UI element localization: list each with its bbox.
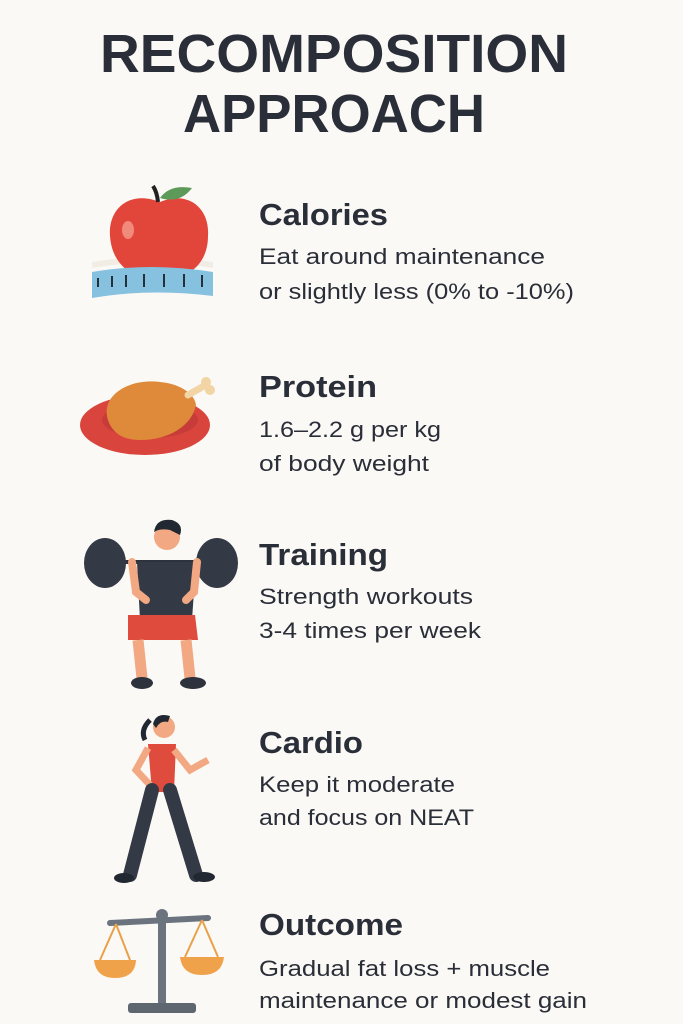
- title: APPROACH: [183, 84, 485, 144]
- heading: training: Training: [259, 537, 388, 572]
- text: protein: of body weight: [259, 451, 429, 476]
- text: cardio: [259, 772, 474, 830]
- icon: walking woman: [114, 715, 215, 883]
- text: calories: [259, 244, 574, 304]
- text: calories: Eat around maintenance: [259, 244, 545, 269]
- icon: squat lifter: [84, 520, 238, 689]
- text: protein: 1.6–2.2 g per kg: [259, 417, 441, 442]
- heading: outcome: Outcome: [259, 907, 403, 942]
- text: cardio: Keep it moderate: [259, 772, 455, 797]
- icon: chicken on plate: [80, 377, 215, 455]
- text: outcome: Gradual fat loss + muscle: [259, 956, 550, 981]
- heading: protein: Protein: [259, 369, 377, 404]
- text: training: [259, 584, 482, 643]
- text: outcome: maintenance or modest gain: [259, 988, 587, 1013]
- text: protein: [259, 417, 441, 476]
- heading: cardio: Cardio: [259, 725, 363, 760]
- text: calories: or slightly less (0% to -10%): [259, 279, 574, 304]
- text: outcome: [259, 956, 587, 1013]
- text: cardio: and focus on NEAT: [259, 805, 474, 830]
- text: training: Strength workouts: [259, 584, 473, 609]
- heading: calories: Calories: [259, 197, 388, 232]
- text: training: 3-4 times per week: [259, 618, 482, 643]
- icon: apple with measuring tape: [92, 186, 213, 298]
- icon: balance scale: [94, 909, 224, 1013]
- title: RECOMPOSITION: [100, 24, 568, 84]
- title: [100, 24, 568, 144]
